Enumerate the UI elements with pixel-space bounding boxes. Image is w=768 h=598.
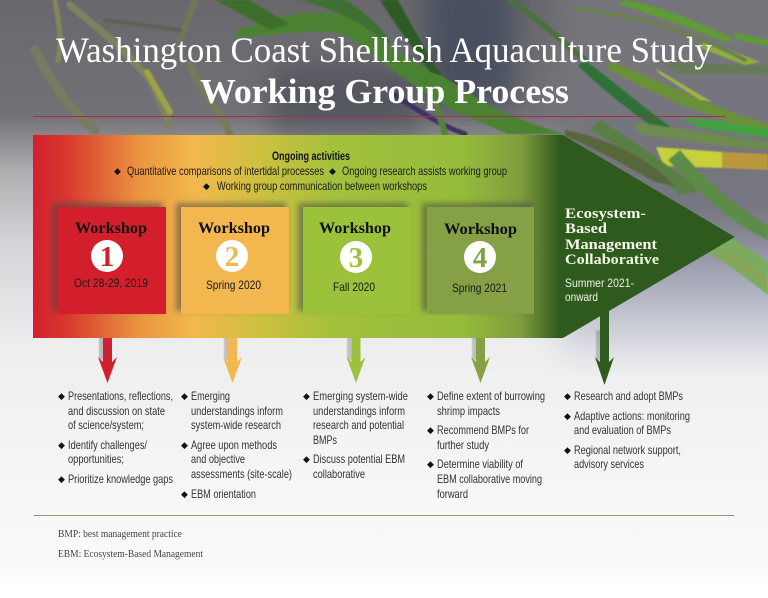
ongoing activities — [114, 149, 507, 193]
footnotes: EBM: Ecosystem-Based Management — [58, 549, 203, 560]
bullets: workshop 4: Determine viability of — [437, 457, 524, 471]
bullets: workshop 1: ◆ — [58, 475, 65, 485]
bullets: workshop 4: forward — [437, 487, 468, 501]
ongoing activities: ◆ — [203, 182, 210, 192]
bullets: workshop 2: Agree upon methods — [191, 438, 277, 452]
panel: ecosystem-based management collaborative: Collaborative — [565, 252, 659, 268]
bullets: workshop 1: and discussion on state — [68, 404, 165, 418]
bullets: collaborative: ◆ — [564, 392, 571, 402]
panel: ecosystem-based management collaborative: Based — [565, 221, 608, 237]
panel: workshop 4 — [422, 203, 534, 314]
panel: ecosystem-based management collaborative: Management — [565, 237, 657, 253]
title — [56, 30, 712, 111]
arrow 4 to bullets — [471, 314, 490, 383]
panel: workshop 3: 3 — [349, 242, 363, 274]
bullets: collaborative: Research and adopt BMPs — [574, 389, 683, 403]
bullets: workshop 2: and objective — [191, 452, 245, 466]
bullets: workshop 3: ◆ — [303, 455, 310, 465]
bullets: workshop 2: system-wide research — [191, 418, 281, 432]
bullets: collaborative: ◆ — [564, 412, 571, 422]
panel: workshop 2 — [176, 203, 289, 314]
bullets: workshop 3 — [303, 389, 408, 481]
bullets: workshop 3: BMPs — [313, 433, 337, 447]
arrow 2 to bullets — [223, 314, 242, 383]
bullets: workshop 1: Presentations, reflections, — [68, 389, 173, 403]
bullets: collaborative: ◆ — [564, 446, 571, 456]
bullets: workshop 1: opportunities; — [68, 452, 124, 466]
bullets: workshop 4: shrimp impacts — [437, 404, 500, 418]
panel: workshop 2: Spring 2020 — [206, 278, 261, 292]
ongoing activities: ◆ — [329, 167, 336, 177]
bullets: workshop 3: understandings inform — [313, 404, 405, 418]
panel: workshop 1: Oct 28-29, 2019 — [74, 276, 148, 290]
panel: workshop 1: Workshop — [75, 220, 147, 237]
panel: ecosystem-based management collaborative: onward — [565, 290, 598, 304]
ongoing activities: Ongoing activities — [272, 149, 350, 163]
bullets: workshop 4: Define extent of burrowing — [437, 389, 545, 403]
panel: workshop 3 — [298, 203, 411, 314]
bullets: collaborative: Adaptive actions: monitoring — [574, 409, 690, 423]
bullets: collaborative: Regional network support, — [574, 443, 681, 457]
panel: workshop 3: Workshop — [319, 220, 391, 237]
bullets: workshop 2: understandings inform — [191, 404, 283, 418]
ongoing activities: Ongoing research assists working group — [342, 164, 507, 178]
bullets: workshop 4: Recommend BMPs for — [437, 423, 529, 437]
bullets: workshop 1: ◆ — [58, 441, 65, 451]
bullets: workshop 2: ◆ — [181, 441, 188, 451]
panel: workshop 3: Fall 2020 — [333, 280, 375, 294]
title: Washington Coast Shellfish Aquaculture Study — [56, 30, 712, 70]
ongoing activities: Quantitative comparisons of intertidal processes — [127, 164, 324, 178]
panel: workshop 2: Workshop — [198, 220, 270, 237]
footnotes: BMP: best management practice — [58, 529, 183, 540]
panel: ecosystem-based management collaborative: Summer 2021- — [565, 276, 634, 290]
bullets: workshop 3: Discuss potential EBM — [313, 452, 405, 466]
bullets: workshop 3: Emerging system-wide — [313, 389, 408, 403]
bullets: workshop 2: ◆ — [181, 490, 188, 500]
ongoing activities: Working group communication between workshops — [217, 179, 427, 193]
bullets: workshop 2: ◆ — [181, 392, 188, 402]
panel: workshop 1 — [53, 203, 166, 314]
arrow 3 to bullets — [346, 314, 366, 383]
bullets: workshop 1: Prioritize knowledge gaps — [68, 472, 173, 486]
panel: ecosystem-based management collaborative: Ecosystem- — [565, 206, 646, 222]
bullets: workshop 4: ◆ — [427, 426, 434, 436]
bullets: workshop 1: Identify challenges/ — [68, 438, 148, 452]
bullets: workshop 4: ◆ — [427, 392, 434, 402]
bullets: workshop 1: of science/system; — [68, 418, 144, 432]
bullets: workshop 3: ◆ — [303, 392, 310, 402]
bullets: collaborative: and evaluation of BMPs — [574, 423, 671, 437]
panel: workshop 4: 4 — [473, 242, 487, 274]
panel: ecosystem-based management collaborative — [565, 206, 659, 304]
bullets: workshop 2: Emerging — [191, 389, 230, 403]
bullets: collaborative: advisory services — [574, 457, 644, 471]
main process arrow band — [33, 135, 735, 338]
arrow 1 to bullets — [98, 314, 117, 383]
panel: workshop 4: Workshop — [444, 221, 517, 238]
bullets: workshop 4 — [427, 389, 545, 501]
panel: workshop 2: 2 — [225, 241, 239, 273]
panel: workshop 1: 1 — [100, 241, 114, 273]
arrow 5 to bullets — [595, 310, 614, 385]
bullets: workshop 4: EBM collaborative moving — [437, 472, 542, 486]
title: Working Group Process — [200, 72, 569, 111]
bullets: workshop 2: EBM orientation — [191, 487, 256, 501]
panel: workshop 4: Spring 2021 — [452, 281, 507, 295]
bullets: workshop 3: collaborative — [313, 467, 365, 481]
bullets: workshop 4: further study — [437, 438, 489, 452]
bullets: workshop 2: assessments (site-scale) — [191, 467, 292, 481]
bullets: workshop 3: research and potential — [313, 418, 404, 432]
bullets: collaborative — [564, 389, 690, 471]
footnotes — [58, 529, 203, 560]
bullets: workshop 1 — [58, 389, 173, 486]
ongoing activities: ◆ — [114, 167, 121, 177]
bullets: workshop 1: ◆ — [58, 392, 65, 402]
bullets: workshop 2 — [181, 389, 292, 501]
bullets: workshop 4: ◆ — [427, 460, 434, 470]
